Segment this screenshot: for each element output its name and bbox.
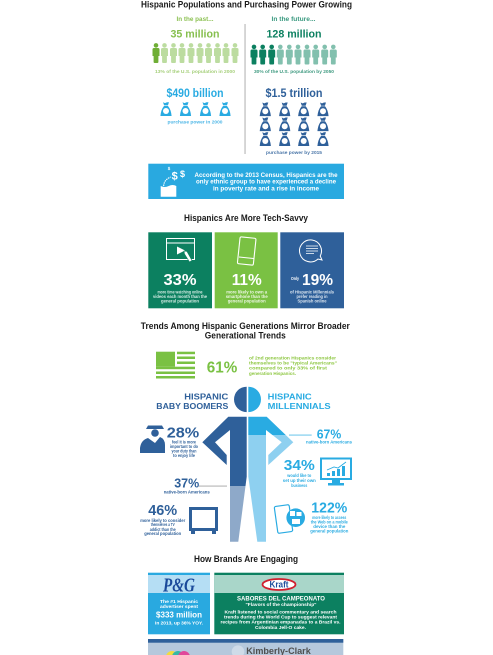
caption: purchase power 2000: purchase power in 2000 [168, 120, 223, 124]
caption: 13 percent: 13% of the U.S. population in 2000 [155, 69, 235, 74]
caption: prefer reading in [296, 294, 328, 299]
caption: addict than the [150, 527, 176, 532]
text: typical Americans: of 2nd generation Hispanics consider [249, 356, 336, 360]
icon: wallet with dollars [161, 166, 185, 197]
stat block: 46 percent [140, 502, 218, 536]
caption: 30 percent: 30% of the U.S. population by 2050 [254, 69, 334, 74]
label: millennials: MILLENNIALS [268, 402, 331, 411]
label: baby boomers: BABY BOOMERS [156, 402, 229, 411]
caption: videos each month than the [153, 294, 208, 299]
caption: general population [161, 298, 199, 303]
callout text [194, 173, 338, 192]
stat: 61 percent: 61% [207, 360, 237, 376]
icon: speech bubble [300, 240, 322, 262]
heading: brands: How Brands Are Engaging [194, 554, 298, 564]
caption: business [291, 483, 308, 488]
panel: Kraft [214, 573, 344, 634]
panel: reading in Spanish [280, 232, 344, 308]
text: advertiser: in 2013, up 36% YOY. [155, 620, 203, 626]
icon: officer [140, 426, 165, 453]
caption: more likely to access [312, 515, 347, 520]
stat: 128 million: 128 million [266, 28, 322, 40]
caption: general population [310, 528, 349, 534]
caption: general population [228, 298, 266, 303]
stat block: 46 percent: 46% [148, 502, 177, 519]
stat: 19 percent: Only [291, 276, 300, 281]
stat: 28% [167, 424, 199, 441]
callout text: According to the 2013 Census, Hispanics are the [194, 173, 338, 179]
stat block: 37 percent [164, 476, 210, 494]
caption: would like to [286, 473, 312, 478]
text: campaign: Colombia Jell-O cake. [255, 625, 306, 630]
caption [170, 440, 198, 458]
icon: American flag [156, 352, 195, 378]
stat block: 67 percent [306, 427, 353, 444]
stat block: 67 percent: 67% [317, 427, 341, 441]
panel: P&G [148, 573, 210, 634]
panel: smartphone [215, 232, 278, 308]
panel: Kimberly-Clark [148, 639, 343, 655]
caption: purchase power 2015: purchase power by 2015 [266, 150, 322, 155]
logo: Kraft: Kraft [270, 580, 288, 590]
stat block: 122 percent [274, 499, 349, 534]
stat: 19 percent: 19% [302, 272, 333, 289]
text: campaign: "Flavors of the championship" [246, 602, 316, 607]
caption: set up their own [283, 478, 316, 483]
icon: monitor with chart [320, 458, 352, 486]
caption: themselves a TV [151, 522, 175, 527]
heading: generational trends: Trends Among Hispanic Generations Mirror Broader [141, 321, 350, 331]
stat: 1.5 trillion: $1.5 trillion [266, 88, 322, 100]
caption: to enjoy life [173, 453, 195, 458]
stat: 490 billion: $490 billion [166, 88, 224, 100]
stat block: 34 percent [283, 457, 352, 488]
divider [244, 24, 246, 154]
stat block: 122 percent: 122% [311, 499, 347, 516]
label: in the past: In the past... [176, 16, 214, 23]
label: in the future: In the future... [272, 16, 316, 23]
caption: your duty than [172, 448, 197, 454]
callout: census [148, 164, 344, 199]
logo: colorful circles [166, 651, 190, 655]
icons: people row future [250, 45, 337, 64]
icons: money bags past [160, 102, 231, 116]
text: advertiser: advertiser spent [160, 604, 198, 609]
icons: money bags future [260, 102, 329, 146]
caption: of Hispanic Millennials [290, 290, 335, 294]
stat block: 37 percent: 37% [174, 476, 199, 490]
stat: 35 million: 35 million [170, 28, 220, 40]
heading: tech-savvy: Hispanics Are More Tech-Savvy [184, 213, 308, 223]
heading: generational trends: Generational Trends [205, 330, 286, 340]
text: campaign: Kraft listened to social commentary and search [224, 610, 337, 614]
text: advertiser: The #1 Hispanic [160, 599, 198, 604]
label: baby boomers [156, 392, 229, 411]
stat: 11 percent: 11% [232, 272, 262, 289]
stat block: 34 percent: 34% [284, 457, 315, 474]
caption: native-born Americans [164, 490, 210, 494]
text: advertiser: $333 million [156, 610, 202, 620]
text: campaign [220, 595, 340, 630]
label: millennials [268, 392, 331, 411]
text: campaign: trends during the World Cup to suggest relevant [224, 614, 338, 620]
panel: in the past [152, 16, 238, 124]
logo: P&G: P&G [162, 574, 195, 596]
text: advertiser [155, 599, 203, 626]
label: millennials: HISPANIC [268, 392, 312, 402]
caption: smartphone than the [226, 294, 268, 299]
caption: more time watching online [158, 290, 203, 294]
icon: wallet with dollars: $ [168, 166, 171, 171]
caption [290, 290, 335, 303]
caption: important to do [170, 444, 198, 449]
text: campaign: recipes from Argentinian empanadas to a Brazil vs. [220, 620, 340, 624]
icon: phone with social [274, 505, 305, 533]
caption: the Web on a mobile [311, 520, 348, 524]
caption [140, 518, 185, 536]
caption [226, 290, 268, 303]
heading: generational trends [141, 321, 350, 340]
caption: device than the [313, 524, 346, 529]
icons: people row past [152, 43, 238, 63]
caption [283, 473, 316, 488]
icon: smartphone [237, 237, 256, 265]
stat block: 28 percent [140, 424, 199, 458]
icon: video browser [166, 238, 194, 262]
text: typical Americans: themselves to be "typical Americans" [249, 360, 337, 366]
figure: split person [202, 387, 293, 542]
caption [153, 290, 208, 303]
stat: 33 percent: 33% [164, 272, 196, 289]
text: typical Americans: compared to only 33% of first [249, 366, 328, 370]
label: baby boomers: HISPANIC [184, 392, 229, 402]
icon: wallet with dollars: $ [172, 170, 178, 182]
icon: television [189, 507, 218, 534]
icon: wallet with dollars: $ [180, 169, 185, 179]
caption: general population [144, 531, 181, 536]
caption [310, 515, 349, 534]
caption: more likely to own a [226, 290, 268, 294]
text: campaign: SABORES DEL CAMPEONATO [237, 595, 325, 602]
caption: Spanish online [298, 298, 327, 303]
caption: native-born Americans [306, 440, 353, 444]
panel: online video [148, 232, 212, 308]
callout text: only ethnic group to have experienced a decline [196, 180, 337, 186]
panel: in the future [250, 16, 337, 155]
caption: more likely to consider [140, 518, 185, 523]
caption: feel it is more [172, 440, 196, 444]
text: typical Americans: generation Hispanics. [249, 371, 296, 376]
text: typical Americans [249, 356, 337, 376]
callout text: in poverty rate and a rise in income [213, 186, 320, 192]
